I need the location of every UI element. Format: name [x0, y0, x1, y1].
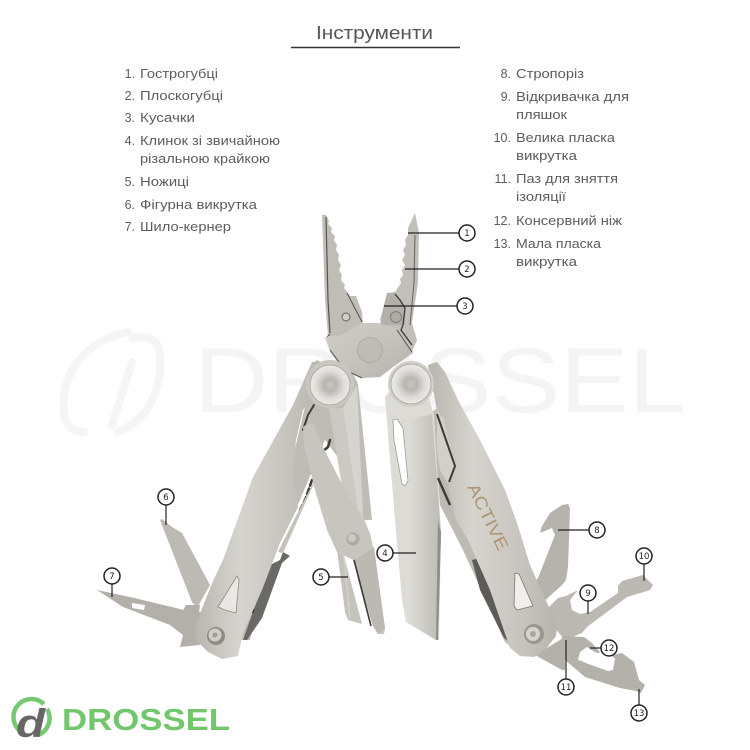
- list: tools 8-13: 11.: [495, 172, 511, 186]
- back plate left: [235, 360, 372, 640]
- callout 3: [384, 298, 473, 314]
- list: tools 1-7: 4.: [125, 134, 135, 148]
- list: tools 8-13: Відкривачка для: [516, 90, 629, 104]
- brand mark: ACTIVE: ACTIVE: [463, 480, 512, 553]
- list: tools 8-13: 10.: [494, 131, 511, 145]
- scissors: [303, 423, 385, 634]
- tool: figured screwdriver: [160, 519, 210, 608]
- list: tools 8-13: 8.: [501, 67, 511, 81]
- list: tools 1-7: 7.: [125, 220, 135, 234]
- right tools: wire stripper blade: [535, 636, 565, 670]
- title: Інструменти: [316, 22, 433, 43]
- callout 12: 12: [604, 644, 614, 654]
- left handle screw: [207, 627, 225, 645]
- logo wordmark: DROSSEL: [62, 702, 230, 737]
- logo icon letter: d: [16, 702, 47, 746]
- callout 13: 13: [634, 709, 644, 719]
- list: tools 8-13: Мала пласка: [516, 237, 601, 251]
- list: tools 8-13: [494, 67, 629, 269]
- list: tools 8-13: Консервний ніж: [516, 214, 623, 228]
- list: tools 1-7: різальною крайкою: [140, 152, 270, 166]
- long slot plate: [329, 408, 370, 540]
- watermark: Drossel logo: DROSSEL: [194, 330, 686, 432]
- callout 10: [636, 548, 652, 581]
- callout 12: [590, 640, 617, 656]
- callout 9: [580, 585, 596, 614]
- right tools: flat screwdriver and bottle opener: [548, 575, 653, 640]
- title underline: [291, 46, 460, 48]
- list: tools 1-7: Фігурна викрутка: [140, 198, 257, 212]
- list: tools 1-7: Плоскогубці: [140, 89, 223, 103]
- callout 11: 11: [561, 683, 571, 693]
- pivot: right: [388, 361, 434, 407]
- callout 2: 2: [464, 265, 470, 275]
- callout 2: [405, 261, 475, 277]
- callout 4: [377, 545, 416, 561]
- callout 6: 6: [163, 493, 169, 503]
- list: tools 8-13: ізоляції: [516, 190, 567, 204]
- dark gaps: [300, 405, 330, 510]
- list: tools 1-7: [125, 67, 280, 234]
- callout 5: 5: [318, 573, 324, 583]
- callout 5: [313, 569, 348, 585]
- right handle sub plate: [432, 400, 510, 646]
- list: tools 1-7: Шило-кернер: [140, 220, 231, 234]
- callout 11: [558, 640, 574, 695]
- tool: awl: [97, 590, 210, 647]
- list: tools 8-13: 9.: [501, 90, 511, 104]
- callout 9: 9: [585, 589, 591, 599]
- list: tools 8-13: викрутка: [516, 149, 577, 163]
- callout 8: [558, 522, 605, 538]
- callout 8: 8: [594, 526, 600, 536]
- list: tools 8-13: пляшок: [516, 108, 568, 122]
- list: tools 8-13: Стропоріз: [516, 67, 584, 81]
- callout 7: [104, 568, 120, 597]
- list: tools 8-13: 12.: [494, 214, 511, 228]
- list: tools 1-7: Клинок зі звичайною: [140, 134, 280, 148]
- right tools: small screwdriver and can opener: [562, 636, 645, 693]
- callout 13: [631, 689, 647, 721]
- plier jaw: right: [380, 213, 419, 352]
- callout 6: [158, 489, 174, 525]
- plier jaw: left: [322, 215, 363, 338]
- callout 4: 4: [382, 549, 388, 559]
- list: tools 1-7: 6.: [125, 198, 135, 212]
- left lower insert: [243, 552, 290, 640]
- right tools: strap cutter: [530, 504, 570, 605]
- pivot: left: [306, 360, 354, 408]
- list: tools 1-7: 1.: [125, 67, 135, 81]
- list: tools 1-7: 2.: [125, 89, 135, 103]
- callout 3: 3: [462, 302, 468, 312]
- list: tools 1-7: Кусачки: [140, 111, 195, 125]
- callout 10: 10: [639, 552, 649, 562]
- plier hub: [325, 323, 413, 378]
- right handle: [428, 362, 557, 657]
- list: tools 8-13: Паз для зняття: [516, 172, 618, 186]
- illustration: multitool: [97, 213, 653, 693]
- logo: Drossel: [13, 699, 230, 746]
- list: tools 1-7: Ножиці: [140, 175, 189, 189]
- list: tools 1-7: 3.: [125, 111, 135, 125]
- callout 7: 7: [109, 572, 115, 582]
- left handle: [195, 362, 322, 659]
- list: tools 1-7: 5.: [125, 175, 135, 189]
- list: tools 8-13: 13.: [494, 237, 511, 251]
- right handle screw: [524, 624, 544, 644]
- callout 1: [408, 225, 475, 241]
- list: tools 8-13: Велика пласка: [516, 131, 615, 145]
- knife blade: [385, 378, 441, 640]
- callout 1: 1: [464, 229, 470, 239]
- list: tools 8-13: викрутка: [516, 255, 577, 269]
- logo icon ring: [13, 699, 50, 735]
- list: tools 1-7: Гострогубці: [140, 67, 218, 81]
